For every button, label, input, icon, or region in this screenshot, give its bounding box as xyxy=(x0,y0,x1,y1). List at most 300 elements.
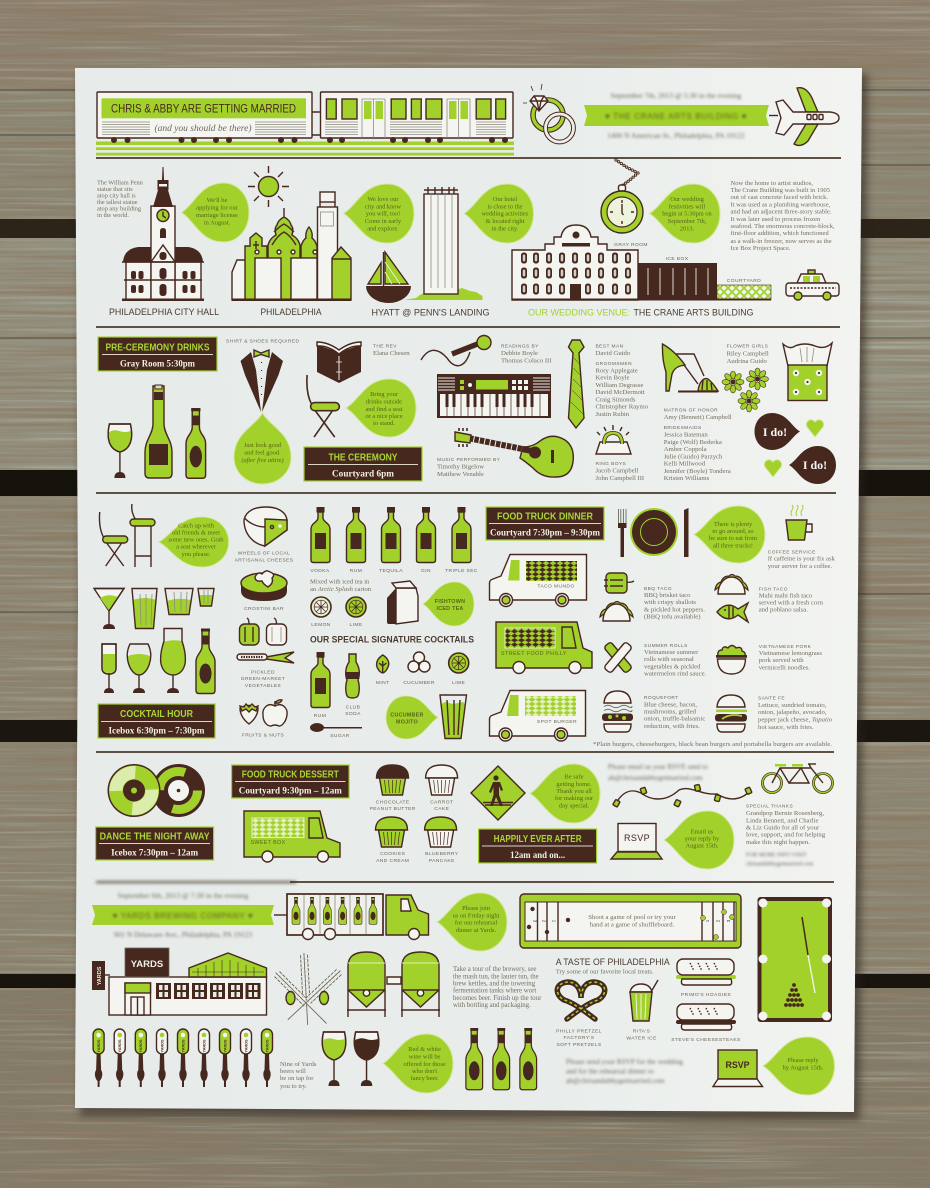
text: fish taco xyxy=(759,586,824,614)
text: brewery tour: fermentation tanks where wort xyxy=(453,988,536,995)
icon: beer delivery truck xyxy=(274,894,428,940)
icon: beer bottle xyxy=(196,628,215,694)
icon: string lights xyxy=(613,784,752,807)
text: nine Yards beers: be on tap for xyxy=(280,1075,314,1082)
text: Roquefort: reduction, with fries. xyxy=(644,723,700,730)
text: Crane Building history: Ice Box Project Space. xyxy=(730,245,791,252)
icon: laptop RSVP xyxy=(611,824,662,859)
speech drop: hotel: in the city. xyxy=(492,225,519,232)
speech drop: love our city: Come in early xyxy=(365,218,402,225)
label: cheeses: ARTISANAL CHEESES xyxy=(235,558,294,564)
text: BBQ taco: with crispy shallots xyxy=(644,599,696,606)
box: dance the night away xyxy=(96,827,214,860)
box: food truck dinner xyxy=(486,507,604,540)
icon: red wine glass xyxy=(354,1032,379,1086)
speech drop: wine offered: wine will be xyxy=(409,1054,441,1060)
icon: laptop RSVP: RSVP xyxy=(624,833,650,843)
text: Crane Building history: The Crane Building was built in 1905 xyxy=(730,187,831,194)
text: matron of honor and bridesmaids: Amy (Bennett) Campbell xyxy=(664,414,732,421)
text: Vietnamese pork: Vietnamese lemongrass xyxy=(759,650,822,657)
icon: sugar spoon xyxy=(310,723,362,739)
text: matron of honor and bridesmaids: Jennifer (Boyle) Tondera xyxy=(664,468,731,475)
wedding venue details (blurred): 1400 N American St., Philadelphia, PA 19122 xyxy=(607,131,745,140)
icon: crostini bar xyxy=(241,571,287,612)
box: the ceremony xyxy=(304,447,422,481)
text: Sante Fe: onion, jalapeño, avocado, xyxy=(758,709,827,716)
speech drop: reply by: Please reply xyxy=(787,1057,819,1064)
text: Crane Building history: It was later used to process frozen xyxy=(730,216,821,223)
icon: rocks glass xyxy=(165,588,193,614)
speech drop: three trucks: be sure to eat from xyxy=(709,535,757,542)
icons: five liquor bottles: TEQUILA xyxy=(379,568,403,574)
icons: nine Yards beer taps: YARDS xyxy=(139,1039,143,1052)
speech drop: be safe: Be safe xyxy=(564,774,584,780)
speech bubble: I do xyxy=(789,446,836,484)
box: cocktail hour: Icebox 6:30pm – 7:30pm xyxy=(108,726,205,736)
food truck: Taco Mundo: TACO MUNDO xyxy=(537,584,575,590)
speech drop: love our city xyxy=(344,184,414,243)
speech drop: bring drinks: and find a seat xyxy=(365,406,403,413)
text: Sante Fe: SANTE FE xyxy=(758,696,785,702)
icon: pickled peppers xyxy=(240,618,286,645)
text: Roquefort: ROQUEFORT xyxy=(644,695,679,701)
speech drop: email reply: August 15th. xyxy=(685,842,719,850)
text: music performed by: Matthew Venable xyxy=(437,471,484,478)
speech drop: catch up xyxy=(159,517,229,567)
poster sheet xyxy=(75,68,868,1120)
speech drop: three trucks xyxy=(694,506,765,563)
speech drop: be safe: day special. xyxy=(559,802,589,810)
icon: soft pretzel: FACTORY'S xyxy=(564,1035,595,1041)
text: special thanks: chrisandabbygetmarried.com xyxy=(746,862,814,868)
speech drop: catch up: Catch up with xyxy=(178,522,215,530)
text: readings: Thomas Colaco III xyxy=(501,358,552,364)
label: pickled vegetables: VEGETABLES xyxy=(245,683,281,689)
text: coffee service xyxy=(768,550,836,570)
text: coffee service: COFFEE SERVICE xyxy=(768,550,816,556)
text: Crane Building history: Now the home to artist studios, xyxy=(730,180,813,187)
speech drop: bring drinks: to stand. xyxy=(373,420,395,427)
text: special thanks: SPECIAL THANKS xyxy=(746,804,793,810)
text: ring boys xyxy=(596,461,644,482)
text: matron of honor and bridesmaids: BRIDESMAIDS xyxy=(664,425,702,431)
icon: tall glass xyxy=(132,588,157,628)
icon: laptop RSVP green: RSVP xyxy=(726,1060,750,1070)
icon: wedding rings xyxy=(523,84,574,142)
rail stripes xyxy=(96,142,514,156)
box: happily ever after: 12am and on... xyxy=(510,850,565,860)
text: matron of honor and bridesmaids xyxy=(664,408,732,482)
icon: pedestrian crossing sign xyxy=(471,766,525,820)
text: brewery tour: with bottling and packaging. xyxy=(453,1002,531,1009)
icons: cocktail glasses xyxy=(94,588,214,629)
rehearsal dinner details (blurred) xyxy=(92,891,274,939)
text: best man and groomsmen: Rory Applegate xyxy=(596,368,638,374)
illustration: Yards brewery: YARDS xyxy=(131,959,163,970)
icon: wine glass xyxy=(108,424,132,478)
icon: keyboard xyxy=(437,374,551,418)
icon: fork, plate, knife xyxy=(618,508,688,557)
icon: club soda xyxy=(345,654,361,717)
text: BBQ taco: BBQ brisket taco xyxy=(644,592,691,599)
icon: white wine glass xyxy=(322,1032,346,1086)
icon: hoagie xyxy=(676,959,736,998)
speech drop: marriage license: We'll be xyxy=(207,197,227,204)
icon: cheese wheel xyxy=(244,507,287,546)
speech drop: three trucks: There is plenty xyxy=(714,521,753,528)
speech drop: catch up: a seat wherever xyxy=(176,544,217,551)
brewery banner xyxy=(92,905,274,925)
shuffleboard: 3 xyxy=(726,919,731,922)
icon: flowers xyxy=(722,368,768,412)
text: special thanks: Linda Bennett, and Charlie xyxy=(746,818,818,824)
text: brewery tour: becomes beer. Finish up the tour xyxy=(453,995,542,1002)
text: matron of honor and bridesmaids: Jessica Bateman xyxy=(664,432,708,438)
text: BBQ taco: & pickled hot peppers. xyxy=(644,606,705,614)
speech drop: love our city: We love our xyxy=(367,196,399,203)
icon: summer rolls xyxy=(604,642,632,673)
text: nine Yards beers: you to try. xyxy=(280,1083,307,1090)
text: nine Yards beers: beers will xyxy=(280,1068,306,1075)
text: music performed by: MUSIC PERFORMED BY xyxy=(437,457,501,463)
text: matron of honor and bridesmaids: Kelli Millwood xyxy=(664,460,706,468)
label: attire: SHIRT & SHOES REQUIRED xyxy=(226,338,300,344)
text: matron of honor and bridesmaids: Kristen Williams xyxy=(664,475,710,482)
label: fruits and nuts: FRUITS & NUTS xyxy=(242,732,285,738)
icon: milk carton xyxy=(387,581,418,624)
icons: three Yards beer bottles xyxy=(466,1028,537,1090)
labels: venue names: HYATT @ PENN'S LANDING xyxy=(372,306,490,318)
speech drop: rehearsal: for our rehearsal xyxy=(455,920,497,926)
box: food truck dessert: Courtyard 9:30pm – 12am xyxy=(239,786,342,796)
illustration: Crane Arts Building xyxy=(512,225,771,300)
box: pre-ceremony drinks: Gray Room 5:30pm xyxy=(120,358,195,368)
text: BBQ taco: (BBQ tofu available) xyxy=(644,614,700,620)
speech drop: catch up: you please. xyxy=(182,551,211,558)
speech drop: rehearsal xyxy=(437,893,507,951)
shuffleboard: 1 xyxy=(705,919,710,922)
icons: five liquor bottles: GIN xyxy=(421,568,431,574)
train wheels xyxy=(111,137,508,143)
icon: apple xyxy=(263,700,287,726)
icon: heart xyxy=(806,420,824,437)
icon: mint: MINT xyxy=(376,680,390,686)
icon: martini xyxy=(94,588,124,629)
icon: heart xyxy=(764,460,782,477)
train car two xyxy=(320,92,513,138)
icons: cupcakes: BLUEBERRY xyxy=(425,851,459,857)
text: RSVP email (blurred): ab@chrisandabbygetmarried.com xyxy=(608,774,703,782)
icon: sun xyxy=(248,166,289,207)
icon: lime xyxy=(346,597,366,628)
text: ring boys: Jacob Campbell xyxy=(596,468,639,474)
icon: high-heel shoe xyxy=(662,344,718,392)
text: special thanks xyxy=(746,804,826,868)
text: summer rolls xyxy=(644,643,707,678)
text: fish taco: and poblano salsa. xyxy=(759,606,808,614)
text: William Penn statue: atop any building xyxy=(97,206,142,212)
speech drop: wine offered: offered for those xyxy=(403,1061,446,1068)
heading: a taste of Philadelphia: Try some of our favorite local treats. xyxy=(556,968,654,976)
speech drop: festivities: September 7th, xyxy=(668,218,707,225)
food truck: Sweet Box: SWEET BOX xyxy=(250,840,286,846)
text: special thanks: love, support, and for helping xyxy=(746,832,826,838)
header train with title xyxy=(96,92,514,156)
text: coffee service: If caffeine is your fix ask xyxy=(768,556,836,562)
speech drop: marriage license: applying for our xyxy=(196,204,239,212)
icon: fish xyxy=(717,603,748,622)
text: Crane Building history: and had an adjacent three-story stable. xyxy=(730,208,832,216)
speech drop: love our city: and explore. xyxy=(367,225,399,232)
speech drop: festivities xyxy=(650,184,720,243)
text: fish taco: FISH TACO xyxy=(759,586,788,592)
text: iced tea mix: Mixed with iced tea in xyxy=(310,578,370,586)
text: best man and groomsmen: BEST MAN xyxy=(596,344,624,350)
icons: nine Yards beer taps: YARDS xyxy=(202,1039,206,1052)
shuffleboard: 2 xyxy=(542,920,546,923)
icons: nine Yards beer taps: YARDS xyxy=(160,1039,164,1052)
rehearsal dinner details (blurred): September 6th, 2013 @ 7:30 in the evening xyxy=(118,891,249,900)
icon: sugar spoon: SUGAR xyxy=(330,733,350,739)
rehearsal dinner details (blurred): 901 N Delaware Ave., Philadelphia, PA 19123 xyxy=(114,930,253,939)
text: nine Yards beers: Nine of Yards xyxy=(280,1061,317,1068)
illustration: Hyatt at Penn's Landing xyxy=(366,187,482,303)
shuffleboard xyxy=(520,894,741,948)
icons: nine Yards beer taps xyxy=(93,1029,272,1087)
speech drop: Fishtown iced tea: FISHTOWN xyxy=(435,599,465,605)
labels: venue names: OUR WEDDING VENUE: xyxy=(528,306,630,318)
text: special thanks: FOR MORE INFO VISIT xyxy=(746,852,807,858)
speech drop: rehearsal: us on Friday night xyxy=(453,912,500,920)
text: best man and groomsmen: William Degrasse xyxy=(596,382,643,389)
heading: signature cocktails: OUR SPECIAL SIGNATURE COCKTAILS xyxy=(310,634,474,644)
speech drop: wine offered: Red & white xyxy=(408,1046,441,1053)
icon: laptop RSVP green xyxy=(713,1050,762,1086)
icon: cucumber: CUCUMBER xyxy=(403,680,435,686)
speech drop: hotel: Our hotel xyxy=(493,196,517,203)
speech drop: email reply: your reply by xyxy=(685,836,720,842)
text: William Penn statue: statue that sits xyxy=(97,186,133,193)
text: best man and groomsmen: Christopher Raymo xyxy=(596,404,649,411)
labels: venue names: PHILADELPHIA xyxy=(260,306,322,317)
icons: five liquor bottles: VODKA xyxy=(310,568,330,574)
icon: tuxedo xyxy=(240,350,283,412)
venue banner: ♥ THE CRANE ARTS BUILDING ♥ xyxy=(605,112,747,121)
box: food truck dinner: FOOD TRUCK DINNER xyxy=(497,512,594,522)
speech drop: wine offered: fancy beer. xyxy=(411,1075,439,1082)
speech drop: bring drinks: drinks outside xyxy=(366,398,402,406)
icons: nine Yards beer taps: YARDS xyxy=(265,1039,269,1052)
illustration: Philadelphia City Hall xyxy=(122,167,204,301)
speech drop: wine offered: who don't xyxy=(412,1068,437,1075)
food truck: Taco Mundo xyxy=(490,554,586,606)
speech drop: hotel xyxy=(464,184,534,243)
text: Roquefort xyxy=(644,695,705,730)
box: the ceremony: THE CEREMONY xyxy=(328,452,398,464)
icon: mint xyxy=(376,655,390,686)
label: pickled vegetables: GREEN-MARKET xyxy=(241,676,285,682)
icon: cheesesteak xyxy=(671,1004,741,1043)
food truck: Spot Burger xyxy=(490,690,586,741)
icon: beer bottle xyxy=(186,408,206,478)
text: Crane Building history: out of cast concrete faced with brick. xyxy=(730,194,828,201)
box: food truck dessert xyxy=(232,765,349,798)
text: Vietnamese pork: vermicelli noodles. xyxy=(759,664,810,672)
speech drop: wine offered xyxy=(383,1034,453,1093)
text: RSVP for wedding (blurred): Please send your RSVP for the wedding xyxy=(566,1057,683,1066)
venue banner xyxy=(584,105,769,126)
text: best man and groomsmen: GROOMSMEN xyxy=(596,361,632,367)
icons: cupcakes: CHOCOLATE xyxy=(376,800,410,806)
icon: rum bottle: RUM xyxy=(314,713,326,719)
text: best man and groomsmen: Justin Rubin xyxy=(596,411,630,418)
train car one: (and you should be there) xyxy=(154,123,252,134)
box: food truck dinner: Courtyard 7:30pm – 9:30pm xyxy=(490,528,600,538)
icon: water ice: WATER ICE xyxy=(626,1036,657,1042)
text: special thanks: make this night happen. xyxy=(746,839,810,846)
speech drop: three trucks: all three trucks! xyxy=(713,542,753,550)
shuffleboard: 3 xyxy=(532,920,538,923)
text: Vietnamese pork: pork served with xyxy=(759,657,804,664)
icon: necktie xyxy=(568,340,584,428)
speech drop: marriage license: in August. xyxy=(204,220,231,226)
text: Sante Fe: hot sauce, with fries. xyxy=(758,724,814,731)
icon: champagne bottle xyxy=(145,385,172,478)
illustration: Philadelphia skyline xyxy=(232,192,351,301)
text: music performed by: Timothy Bigelow xyxy=(437,464,484,470)
text: Sante Fe: pepper jack cheese, Tapatio xyxy=(758,716,832,724)
icon: rum bottle xyxy=(311,652,330,719)
speech drop: Fishtown iced tea: ICED TEA xyxy=(436,606,464,612)
icon: vinyl records xyxy=(108,764,205,817)
shuffleboard: hand at a game of shuffleboard. xyxy=(590,922,675,928)
icons: cupcakes: COOKIES xyxy=(380,851,406,857)
text: flower girls: Audrina Guido xyxy=(727,358,768,365)
text: flower girls: FLOWER GIRLS xyxy=(727,344,768,350)
text: summer rolls: rolls with seasonal xyxy=(644,656,694,663)
speech drop: rehearsal: dinner at Yards. xyxy=(456,927,496,934)
text: summer rolls: SUMMER ROLLS xyxy=(644,643,688,649)
icon: soft pretzel: PHILLY PRETZEL xyxy=(556,1028,602,1034)
icons: cupcakes: CAKE xyxy=(434,806,450,812)
speech drop: catch up: old friends & meet xyxy=(172,530,220,536)
text: ring boys: John Campbell III xyxy=(596,475,644,482)
speech drop: Fishtown iced tea xyxy=(423,582,474,626)
text: best man and groomsmen xyxy=(596,344,649,418)
text: Sante Fe xyxy=(758,696,833,731)
speech drop: email reply: Email us xyxy=(691,828,714,836)
text: best man and groomsmen: Craig Simonds xyxy=(596,396,636,404)
shuffleboard: 2 xyxy=(716,919,720,922)
wedding venue details (blurred) xyxy=(584,91,769,140)
speech drop: festivities: begin at 5:30pm on xyxy=(662,211,713,218)
icons: wines and beer row xyxy=(102,628,215,694)
text: matron of honor and bridesmaids: Paige (Wolf) Bederka xyxy=(664,439,722,446)
icon: coffee cup xyxy=(786,505,812,540)
icon: tissue box xyxy=(783,343,832,400)
text: best man and groomsmen: David Guido xyxy=(596,350,631,357)
text: brewery tour: brew kettles, and the towering xyxy=(453,980,536,988)
text: flower girls xyxy=(727,344,769,365)
box: pre-ceremony drinks: PRE-CEREMONY DRINKS xyxy=(106,342,210,354)
label: pickled vegetables: PICKLED xyxy=(251,670,275,676)
labels: venue names xyxy=(109,306,754,318)
text: special thanks: & Liz Guido for all of your xyxy=(746,824,820,832)
heading: a taste of Philadelphia: A TASTE OF PHILADELPHIA xyxy=(556,956,670,967)
icon: water ice: RITA'S xyxy=(633,1028,651,1034)
speech bubble: I do xyxy=(754,413,800,450)
icons: nine Yards beer taps: YARDS xyxy=(118,1039,122,1052)
food truck: Spot Burger: SPOT BURGER xyxy=(537,719,577,725)
icon: lime xyxy=(449,653,469,686)
speech drop: festivities: Our wedding xyxy=(670,196,705,203)
icon: flute xyxy=(102,644,116,693)
text: William Penn statue: the tallest statue xyxy=(97,199,138,206)
text: BBQ taco xyxy=(644,586,705,620)
text: Crane Building history: first-floor addition, which functioned xyxy=(730,230,829,237)
icon: carrot xyxy=(237,652,294,663)
icon: lime: LIME xyxy=(452,680,466,686)
text: best man and groomsmen: David McDermott xyxy=(596,389,645,396)
text: RSVP email (blurred): Please email us your RSVP, send to xyxy=(608,763,708,771)
labels: venue names: PHILADELPHIA CITY HALL xyxy=(109,306,219,317)
text: matron of honor and bridesmaids: Julie (Guido) Parzych xyxy=(664,454,723,460)
box: happily ever after: HAPPILY EVER AFTER xyxy=(494,834,582,845)
speech bubble: I do: I do! xyxy=(803,458,827,472)
speech drop: three trucks: to go around, so xyxy=(712,528,754,535)
text: Vietnamese pork xyxy=(759,644,822,672)
speech drop: cucumber mojito: MOJITO xyxy=(396,720,418,726)
speech drop: love our city: city and know xyxy=(365,203,401,210)
text: Crane Building history: as a walk-in freezer, now serves as the xyxy=(730,238,832,245)
speech drop: be safe: Thank you all xyxy=(556,788,592,795)
text: Sante Fe: Lettuce, sundried tomato, xyxy=(758,702,827,709)
icon: lime: LIME xyxy=(349,622,363,628)
icon: wheat and hops xyxy=(276,953,340,1025)
icon: taco xyxy=(600,602,633,621)
speech drop: attire: (after five attire) xyxy=(241,457,284,464)
text: Roquefort: onion, truffle-balsamic xyxy=(644,716,705,722)
speech drop: email reply xyxy=(664,811,734,869)
icon: mojito glass xyxy=(440,695,466,738)
icons: nine Yards beer taps: YARDS xyxy=(223,1039,227,1052)
box: cocktail hour xyxy=(98,704,215,738)
icons: cupcakes xyxy=(370,765,459,864)
speech drop: bring drinks: or a nice place xyxy=(365,413,403,420)
icon: tulip glass xyxy=(161,628,185,693)
speech drop: rehearsal: Please join xyxy=(462,905,491,912)
speech drop: be safe xyxy=(530,764,600,823)
labels: venue names: THE CRANE ARTS BUILDING xyxy=(634,306,754,318)
speech drop: be safe: for making our xyxy=(555,795,594,802)
box: the ceremony: Courtyard 6pm xyxy=(332,468,394,478)
icon: folding chair xyxy=(307,375,339,437)
box: pre-ceremony drinks xyxy=(98,337,217,371)
speech drop: catch up: some new ones. Grab xyxy=(168,536,224,544)
icons: five liquor bottles xyxy=(310,507,478,574)
box: cocktail hour: COCKTAIL HOUR xyxy=(120,709,194,720)
speech drop: hotel: & located right xyxy=(486,218,525,225)
text: RSVP for wedding (blurred): and for the rehearsal dinner to xyxy=(566,1066,654,1076)
text: William Penn statue: in the world. xyxy=(97,212,129,219)
speech drop: attire xyxy=(234,413,291,484)
icon: noodle bowl xyxy=(716,646,747,674)
icon: ring pillow xyxy=(596,425,631,454)
icons: cupcakes: CARROT xyxy=(430,800,453,806)
icons: nine Yards beer taps: YARDS xyxy=(181,1039,185,1052)
icon: soft pretzel: SOFT PRETZELS xyxy=(556,1042,602,1048)
text: best man and groomsmen: Kevin Boyle xyxy=(596,375,630,382)
